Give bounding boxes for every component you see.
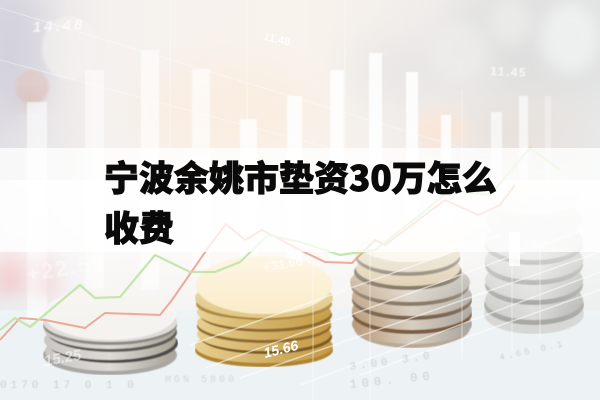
line chart: red	[0, 185, 515, 340]
printed table numbers: 0170 17 0 1 0	[0, 380, 138, 392]
bright vertical marker	[509, 232, 520, 266]
chart numbers: 15.25	[43, 347, 83, 370]
red blurred shapes	[0, 252, 58, 295]
bokeh lights	[15, 0, 600, 107]
title band	[0, 148, 600, 252]
bar chart	[27, 50, 551, 340]
overlay diagonal lines	[190, 224, 600, 400]
line chart: green	[0, 148, 560, 330]
chart numbers: 11.45	[490, 64, 527, 80]
white haze over coin tops	[0, 180, 600, 320]
coin stack: gold and copper	[350, 218, 472, 348]
chart numbers	[25, 16, 527, 370]
coin stack: gold	[195, 256, 333, 367]
chart numbers: +31.66	[262, 253, 304, 275]
chart numbers: 15.66	[262, 337, 300, 361]
printed table numbers: 3.00 3.0	[349, 350, 435, 374]
coin stack: pale grey	[484, 182, 584, 334]
printed table numbers	[0, 339, 566, 392]
printed table numbers: 4.65 0.1	[499, 339, 566, 363]
printed table numbers: MGN 5800	[165, 375, 237, 386]
coin stack: silver	[43, 288, 178, 375]
chart numbers: +22.55	[25, 248, 108, 287]
title: 宁波余姚市垫资30万怎么收费	[104, 151, 497, 252]
printed table numbers: 100. 00	[349, 369, 435, 392]
chart numbers: 11.48	[262, 31, 291, 49]
chart numbers: 14.48	[32, 16, 86, 36]
